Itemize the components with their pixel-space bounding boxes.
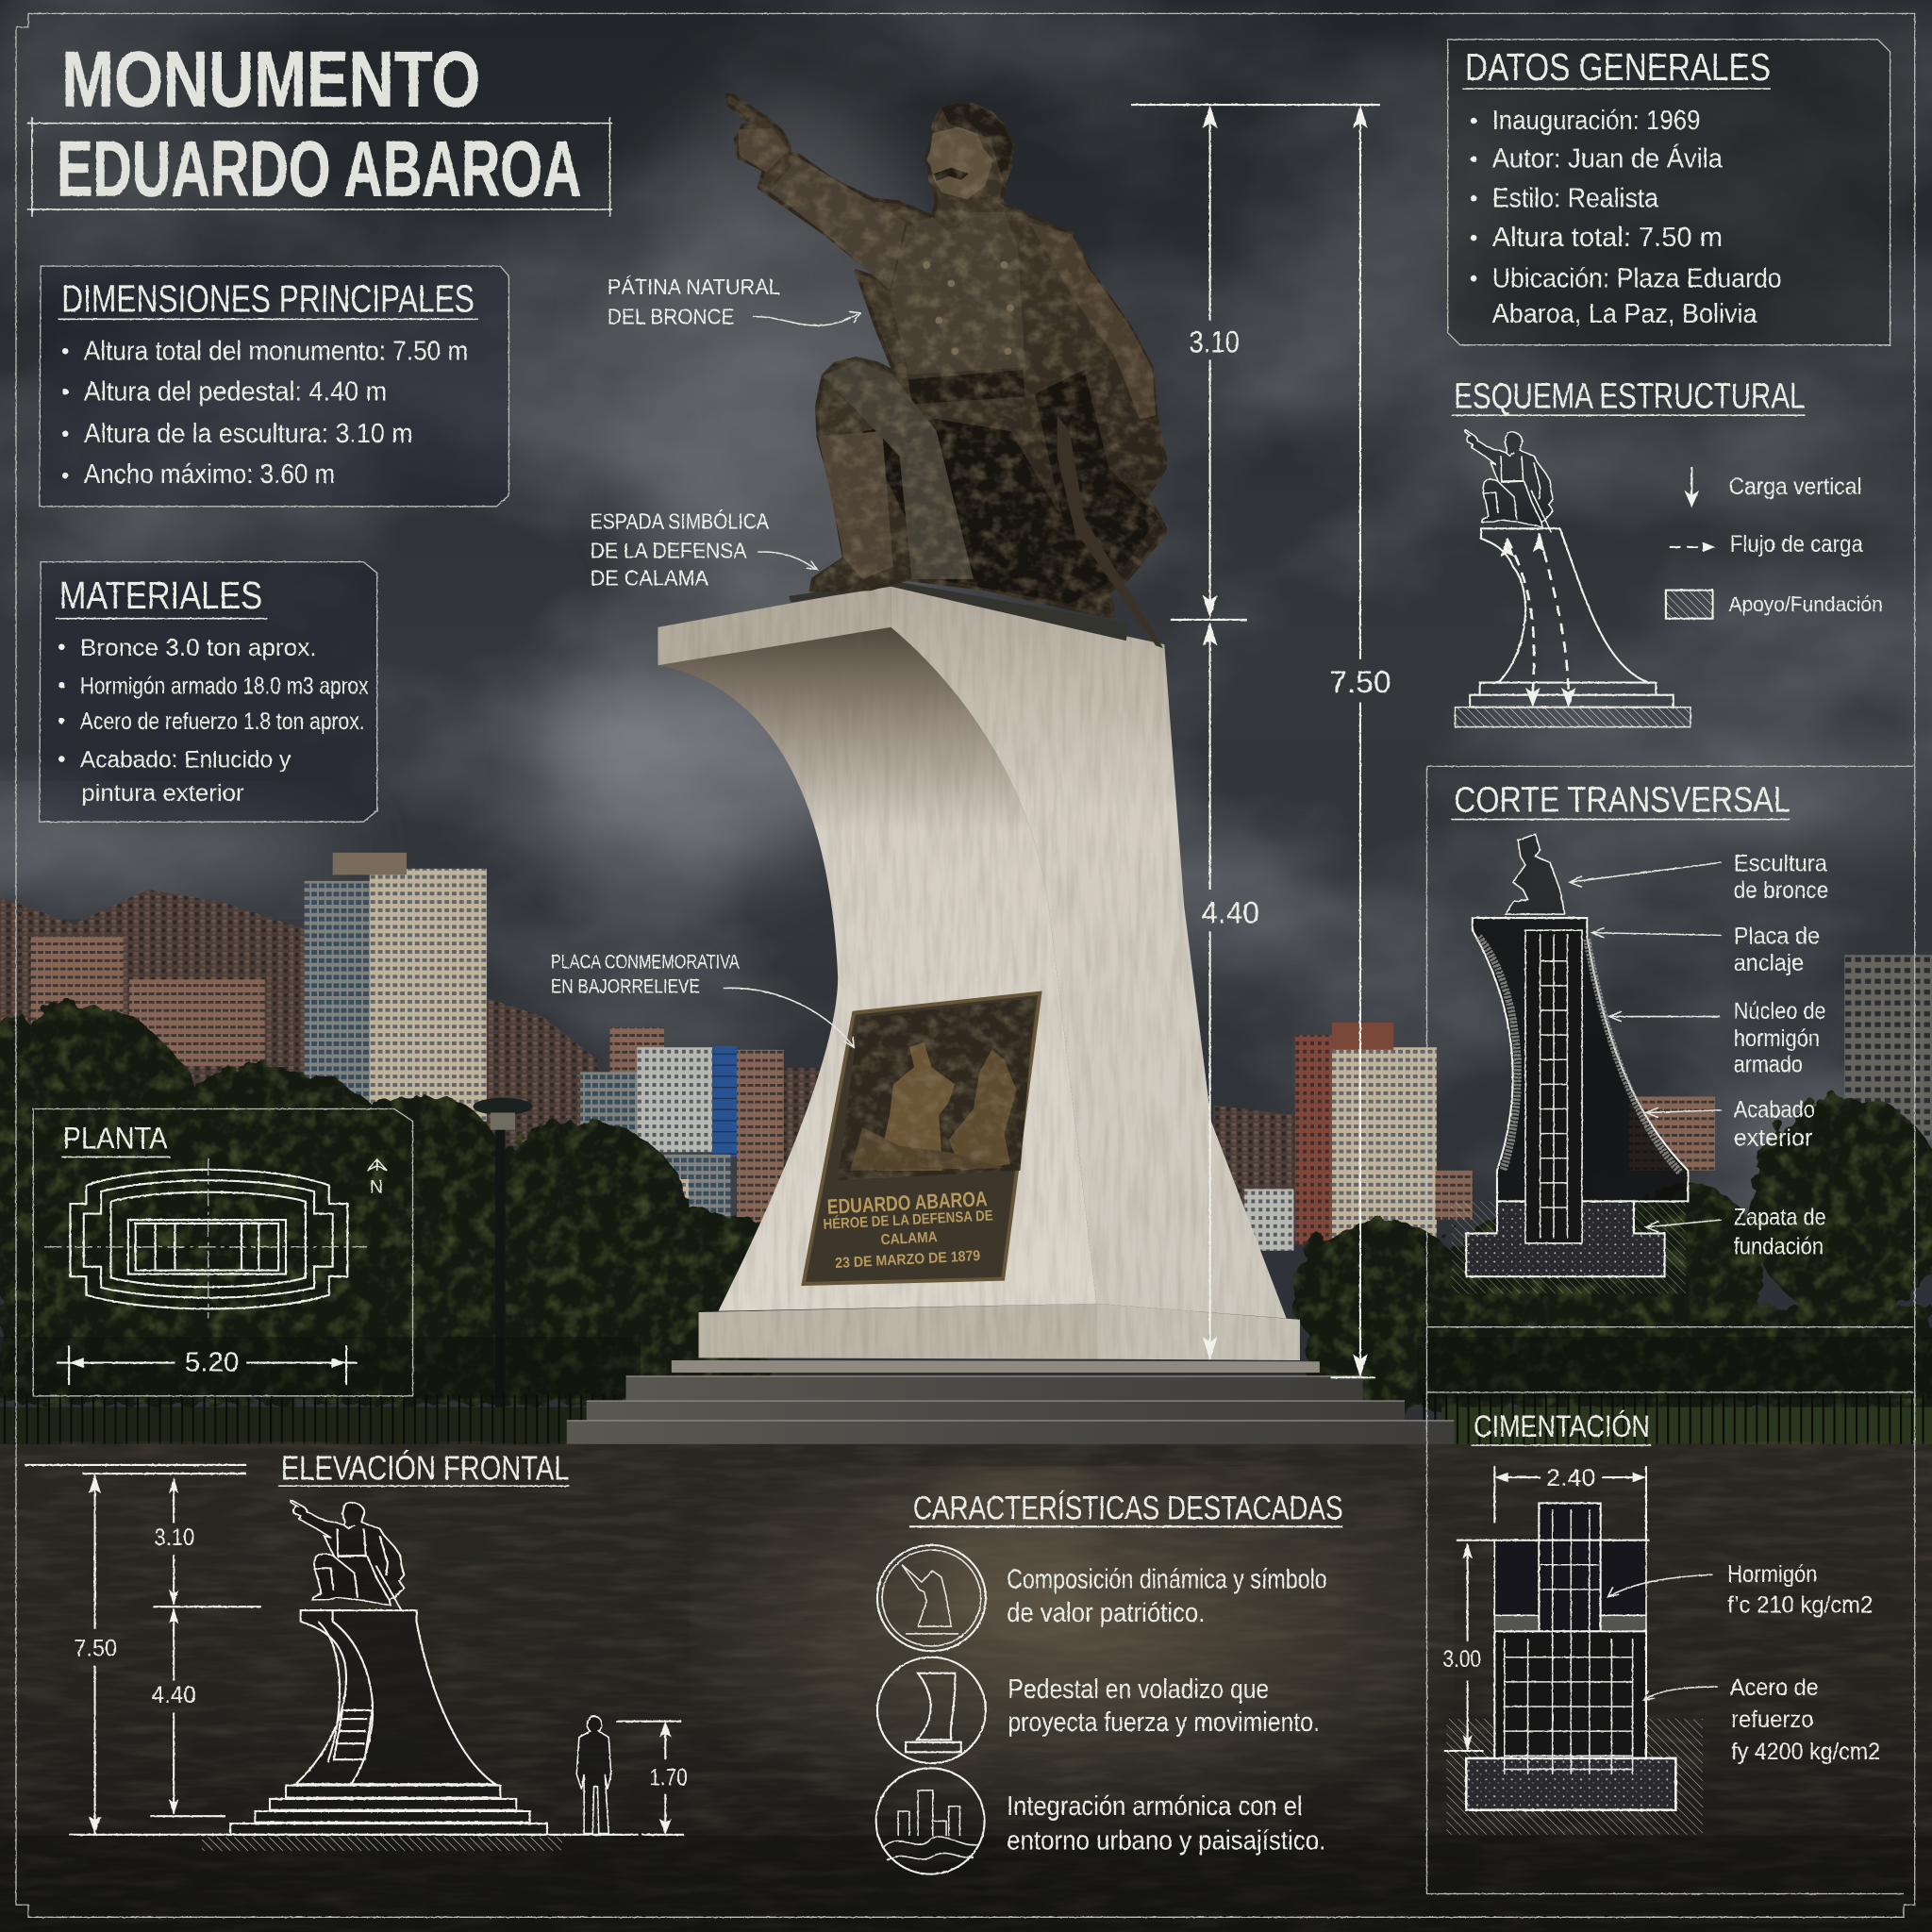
corte: labels: armado: [1734, 1052, 1803, 1077]
cimentación: soil hatch: [1446, 1719, 1703, 1835]
corte: labels: anclaje: [1734, 951, 1804, 976]
elevación: human scale figure: 1.70: [649, 1766, 688, 1791]
panel: datos generales: Inauguración: 1969: [1492, 106, 1700, 136]
diagram: planta: [33, 1109, 413, 1396]
corte: leader arrows: [1570, 862, 1722, 1232]
cimentación: leader arrows: [1607, 1574, 1718, 1700]
cimentación: labels: fy 4200 kg/cm2: [1731, 1740, 1880, 1765]
diagram: elevación frontal: [25, 1449, 688, 1851]
cimentación: labels: f’c 210 kg/cm2: [1727, 1593, 1873, 1619]
panel: materiales: pintura exterior: [81, 781, 244, 807]
plaque: inscription: [822, 1187, 995, 1273]
elevación: pedestal: [295, 1610, 495, 1784]
background: fence and grass: [0, 1395, 1932, 1461]
planta: plan outline: [70, 1170, 347, 1308]
planta: north arrow: [367, 1159, 387, 1197]
corte: seated sculpture: [1506, 834, 1565, 914]
plaque: inscription: CALAMA: [880, 1229, 938, 1248]
panel: dimensiones principales: Ancho máximo: 3.60 m: [84, 459, 335, 490]
elevación: dimensions: 3.10: [154, 1525, 194, 1551]
elevación: human scale figure: [576, 1716, 688, 1835]
diagram: esquema estructural: ESQUEMA ESTRUCTURAL: [1454, 376, 1805, 416]
main dimension lines: 3.10: [1189, 325, 1240, 359]
diagram: cimentación: [1442, 1408, 1880, 1835]
corte: finish shell: [1478, 937, 1681, 1173]
annotation: placa conmemorativa: [551, 952, 854, 1047]
annotation: pátina natural: [608, 275, 860, 329]
esquema: legend: Carga vertical: [1728, 475, 1862, 500]
elevación: dimensions: 7.50: [74, 1636, 117, 1661]
panel: dimensiones principales: [40, 266, 508, 507]
diagram: corte transversal: CORTE TRANSVERSAL: [1454, 781, 1790, 821]
diagram: planta: PLANTA: [63, 1120, 168, 1155]
monument: bronze statue: [725, 93, 1167, 648]
corte: labels: [1734, 851, 1828, 1260]
planta: north arrow: N: [370, 1176, 383, 1197]
text: composición: Composición dinámica y símbolo: [1007, 1565, 1327, 1595]
corte: footing: [1466, 1201, 1665, 1276]
annotation: espada simbólica: ESPADA SIMBÓLICA: [591, 508, 769, 533]
esquema: statue sketch: [1465, 430, 1553, 532]
elevación: dimensions: 4.40: [152, 1683, 196, 1708]
panel: materiales: Acero de refuerzo 1.8 ton aprox.: [80, 709, 365, 735]
cimentación: labels: Hormigón: [1727, 1562, 1818, 1588]
corte: reinforced core: [1525, 930, 1582, 1243]
esquema: legend: [1666, 467, 1883, 619]
panel: materiales: [40, 562, 377, 822]
panel: dimensiones principales: DIMENSIONES PRINCIPALES: [61, 276, 475, 320]
panel: datos generales: Autor: Juan de Ávila: [1492, 143, 1723, 175]
cimentación: labels: Acero de: [1730, 1675, 1819, 1701]
cimentación: ground level line: [1457, 1540, 1650, 1541]
monument: plinth: [699, 1304, 1300, 1360]
background: park trees: [0, 1004, 1932, 1417]
esquema: foundation hatch: [1456, 708, 1690, 727]
elevación: pedestal arris: [318, 1610, 373, 1784]
corte: labels: Placa de: [1734, 924, 1820, 949]
main dimension lines: [1131, 105, 1391, 1377]
planta: center axes: [44, 1158, 367, 1319]
annotation: pátina natural: PÁTINA NATURAL: [608, 275, 780, 299]
diagram: cimentación: CIMENTACIÓN: [1474, 1408, 1650, 1443]
cimentación: collar: [1494, 1615, 1646, 1631]
panel: datos generales: Altura total: 7.50 m: [1492, 223, 1723, 253]
icon: statue medallion: [877, 1545, 986, 1651]
elevación: dimensions: [25, 1465, 639, 1835]
background: stormy sky: [0, 0, 1932, 1478]
esquema: pedestal outline: [1470, 528, 1674, 708]
title: MONUMENTO: [61, 34, 480, 123]
cimentación: top width dimension: [1494, 1466, 1646, 1541]
panel: materiales: MATERIALES: [59, 574, 262, 617]
monument: curved pedestal: [658, 585, 1287, 1319]
section: características destacadas: CARACTERÍSTICAS DESTACADAS: [913, 1490, 1343, 1526]
cimentación: column: [1539, 1503, 1601, 1631]
cimentación: pier: [1494, 1631, 1646, 1758]
text: pedestal: [1008, 1674, 1320, 1738]
planta: width dimension: 5.20: [185, 1348, 239, 1378]
corte: section body: [1473, 918, 1688, 1201]
annotation: espada simbólica: DE CALAMA: [591, 565, 708, 590]
corte: labels: Zapata de: [1734, 1205, 1826, 1230]
panel: datos generales: [1448, 40, 1890, 345]
main dimension lines: 4.40: [1201, 894, 1259, 929]
cimentación: footing: [1466, 1758, 1675, 1810]
plaque: inscription: EDUARDO ABAROA: [826, 1187, 988, 1219]
esquema: legend: Apoyo/Fundación: [1728, 592, 1883, 616]
elevación: steps: [230, 1786, 547, 1835]
background: wet plaza ground: [0, 1444, 1932, 1932]
diagram: corte transversal: [1426, 766, 1913, 1894]
esquema: load flow: [1501, 534, 1576, 708]
esquema: legend: Flujo de carga: [1730, 532, 1863, 558]
text: integración: entorno urbano y paisajístico.: [1007, 1825, 1325, 1856]
text: integración: [1007, 1791, 1325, 1856]
annotation: espada simbólica: [591, 508, 817, 590]
annotation: pátina natural: DEL BRONCE: [608, 305, 734, 329]
panel: dimensiones principales: Altura del pedestal: 4.40 m: [84, 376, 387, 407]
elevación: statue sketch: [291, 1501, 404, 1611]
panel: datos generales: Estilo: Realista: [1492, 183, 1658, 213]
cimentación: depth dimension: 3.00: [1442, 1647, 1481, 1673]
elevación: ground hatch: [202, 1837, 562, 1851]
background: city skyline: [0, 853, 1932, 1251]
annotation: espada simbólica: DE LA DEFENSA: [591, 539, 747, 563]
corte: labels: Núcleo de: [1734, 999, 1826, 1024]
corte: labels: hormigón: [1734, 1026, 1820, 1052]
text: composición: [1007, 1565, 1327, 1628]
main dimension lines: 7.50: [1329, 664, 1391, 699]
corte: labels: Escultura: [1734, 851, 1827, 876]
cimentación: labels: [1727, 1562, 1880, 1765]
panel: dimensiones principales: Altura total del monumento: 7.50 m: [84, 336, 468, 366]
planta: inner plinth rectangles: [128, 1220, 286, 1274]
corte: soil hatch: [1452, 1201, 1686, 1293]
icon: city medallion: [876, 1768, 985, 1874]
cimentación: depth dimension: [1442, 1542, 1484, 1751]
planta: width dimension: [57, 1345, 358, 1385]
panel: materiales: Hormigón armado 18.0 m3 aprox: [80, 674, 369, 699]
cimentación: reinforcement grid: [1505, 1509, 1633, 1774]
diagram: elevación frontal: ELEVACIÓN FRONTAL: [281, 1449, 569, 1488]
text: integración: Integración armónica con el: [1007, 1791, 1303, 1822]
text: pedestal: proyecta fuerza y movimiento.: [1008, 1707, 1320, 1738]
corte: labels: de bronce: [1734, 878, 1828, 904]
plaque: inscription: HÉROE DE LA DEFENSA DE: [823, 1206, 993, 1233]
text: pedestal: Pedestal en voladizo que: [1008, 1674, 1269, 1705]
annotation: placa conmemorativa: PLACA CONMEMORATIVA: [551, 952, 740, 974]
panel: dimensiones principales: Altura de la escultura: 3.10 m: [84, 419, 413, 449]
panel: materiales: Acabado: Enlucido y: [80, 748, 291, 774]
corte: labels: Acabado: [1734, 1098, 1815, 1124]
cimentación: backfill: [1494, 1541, 1646, 1615]
panel: datos generales: DATOS GENERALES: [1465, 45, 1771, 89]
text: composición: de valor patriótico.: [1007, 1598, 1205, 1628]
icon: pedestal medallion: [877, 1657, 986, 1763]
panel: datos generales: Ubicación: Plaza Eduardo: [1492, 263, 1782, 293]
plaque: relief figures: [838, 998, 1035, 1180]
plaque: inscription: 23 DE MARZO DE 1879: [835, 1248, 981, 1272]
elevación: plaque: [334, 1710, 372, 1759]
annotation: placa conmemorativa: EN BAJORRELIEVE: [551, 976, 700, 998]
cimentación: top width dimension: 2.40: [1546, 1466, 1595, 1491]
corte: labels: fundación: [1734, 1235, 1824, 1260]
title: EDUARDO ABAROA: [57, 125, 581, 213]
cimentación: labels: refuerzo: [1731, 1707, 1814, 1733]
monument: commemorative bronze plaque: [804, 993, 1040, 1284]
panel: materiales: Bronce 3.0 ton aprox.: [80, 636, 317, 661]
diagram: esquema estructural: [1452, 376, 1883, 727]
corte: labels: exterior: [1734, 1126, 1812, 1152]
monument: stone steps: [567, 1360, 1454, 1444]
panel: datos generales: Abaroa, La Paz, Bolivia: [1492, 299, 1757, 329]
section: características destacadas: [876, 1490, 1343, 1874]
title: [27, 34, 612, 217]
